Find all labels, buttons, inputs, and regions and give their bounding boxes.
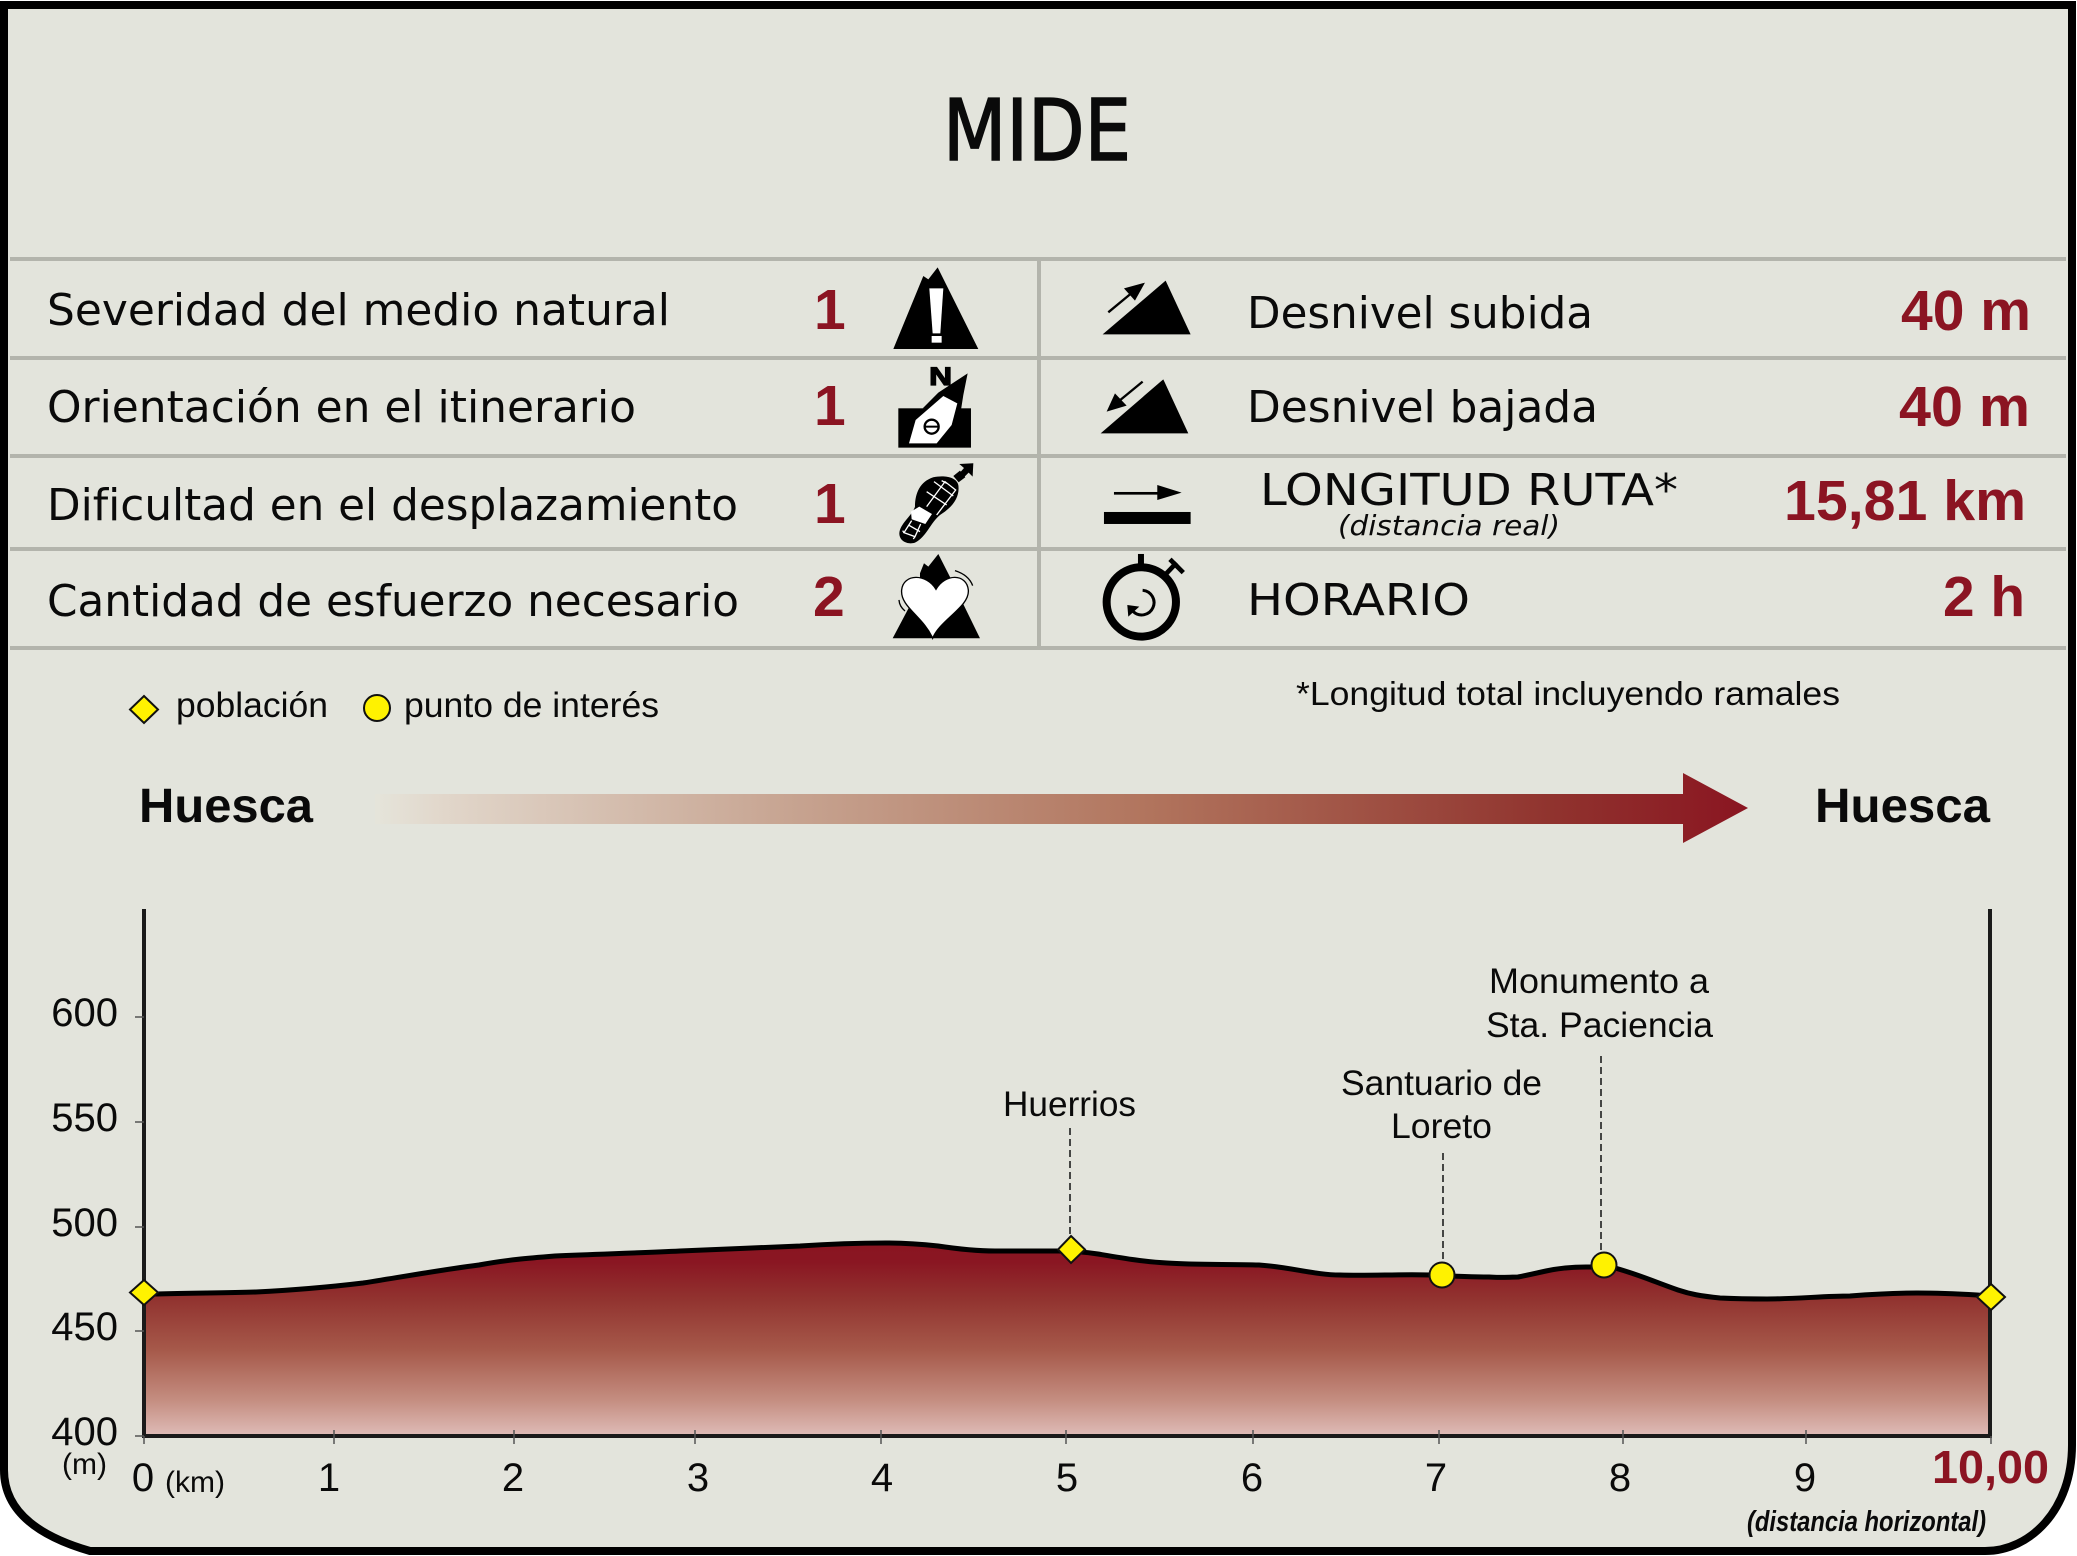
axes xyxy=(135,909,1992,1444)
x axis labels: 6 xyxy=(1241,1456,1263,1500)
x axis labels: 3 xyxy=(687,1456,709,1500)
x axis labels: 4 xyxy=(871,1456,893,1500)
icon: descent xyxy=(1101,379,1188,433)
icon: orientation compass: N xyxy=(929,364,952,391)
elevation chart xyxy=(51,909,2049,1538)
label: horario: HORARIO xyxy=(1247,575,1470,626)
direction arrow xyxy=(375,773,1748,843)
x axis labels: 2 xyxy=(502,1456,524,1500)
y axis unit: (m) xyxy=(62,1448,107,1481)
legend label: punto de interes: punto de interés xyxy=(404,686,659,725)
place label: Santuario de Loreto: Santuario de xyxy=(1341,1064,1542,1103)
score: esfuerzo: 2 xyxy=(813,565,845,629)
label: desnivel bajada: Desnivel bajada xyxy=(1247,382,1598,433)
route start label: Huesca xyxy=(139,780,313,833)
x axis labels: 1 xyxy=(318,1456,340,1500)
marker: Huesca start xyxy=(130,1280,158,1305)
label: cantidad: Cantidad de esfuerzo necesario xyxy=(47,576,739,627)
legend marker: poblacion xyxy=(130,696,158,723)
y axis labels: 600 xyxy=(51,991,118,1035)
route end label: Huesca xyxy=(1815,780,1990,833)
legend label: poblacion: población xyxy=(176,686,328,725)
y axis labels: 450 xyxy=(51,1305,118,1349)
marker: Huesca end xyxy=(1977,1284,2005,1310)
label: distancia real: (distancia real) xyxy=(1338,509,1560,542)
icon: severity mountain xyxy=(893,267,978,349)
icon: heart mountain xyxy=(893,554,980,638)
x axis labels xyxy=(132,1456,1816,1500)
x axis labels: 8 xyxy=(1609,1456,1631,1500)
y axis labels xyxy=(51,991,118,1454)
legend xyxy=(130,686,659,725)
place label: Santuario de Loreto xyxy=(1341,1064,1542,1146)
x axis labels: 9 xyxy=(1794,1456,1816,1500)
profile line xyxy=(144,1243,1990,1299)
marker: Huerrios xyxy=(1058,1236,1085,1263)
value: bajada: 40 m xyxy=(1899,375,2030,439)
label: severidad: Severidad del medio natural xyxy=(47,285,670,336)
value: horario: 2 h xyxy=(1943,565,2025,629)
panel: MIDE left column xyxy=(47,278,846,629)
place label: Santuario de Loreto: Loreto xyxy=(1391,1107,1492,1146)
leader lines xyxy=(1070,1056,1601,1264)
total distance: 10,00 xyxy=(1932,1441,2049,1493)
horizontal distance note: (distancia horizontal) xyxy=(1747,1506,1986,1538)
value: longitud: 15,81 km xyxy=(1784,469,2026,533)
y axis labels: 500 xyxy=(51,1201,118,1245)
y axis labels: 400 xyxy=(51,1410,118,1454)
label: longitud ruta: LONGITUD RUTA* xyxy=(1260,465,1678,516)
x axis labels: 7 xyxy=(1425,1456,1447,1500)
score: severidad: 1 xyxy=(814,278,846,342)
icon: distance xyxy=(1104,485,1191,524)
marker: Monumento a Sta. Paciencia xyxy=(1592,1252,1616,1278)
x axis labels: 0 xyxy=(132,1456,154,1500)
panel: MIDE right column xyxy=(1247,279,2031,629)
label: dificultad: Dificultad en el desplazamiento xyxy=(47,480,738,531)
place label: Monumento a Sta. Paciencia: Monumento a xyxy=(1489,962,1710,1001)
score: dificultad: 1 xyxy=(814,472,846,536)
label: orientacion: Orientación en el itinerario xyxy=(47,382,636,433)
x axis unit: (km) xyxy=(165,1466,225,1499)
place label: Monumento a Sta. Paciencia: Sta. Paciencia xyxy=(1486,1006,1714,1045)
marker: Santuario de Loreto xyxy=(1430,1262,1454,1288)
footnote: *Longitud total incluyendo ramales xyxy=(1296,675,1840,712)
icon: orientation compass xyxy=(898,364,971,448)
profile area xyxy=(144,1243,1990,1436)
y axis labels: 550 xyxy=(51,1096,118,1140)
legend marker: punto de interes xyxy=(364,695,390,721)
x axis labels: 5 xyxy=(1056,1456,1078,1500)
label: desnivel subida: Desnivel subida xyxy=(1247,288,1593,339)
place label: Monumento a Sta. Paciencia xyxy=(1486,962,1714,1045)
icon: stopwatch xyxy=(1107,554,1183,637)
icon: boot sole xyxy=(899,463,973,543)
table grid xyxy=(10,257,2066,650)
score: orientacion: 1 xyxy=(814,374,846,438)
value: subida: 40 m xyxy=(1901,279,2031,343)
title: MIDE xyxy=(943,82,1131,181)
icon: ascent xyxy=(1103,281,1191,334)
place label: Huerrios: Huerrios xyxy=(1003,1085,1136,1124)
